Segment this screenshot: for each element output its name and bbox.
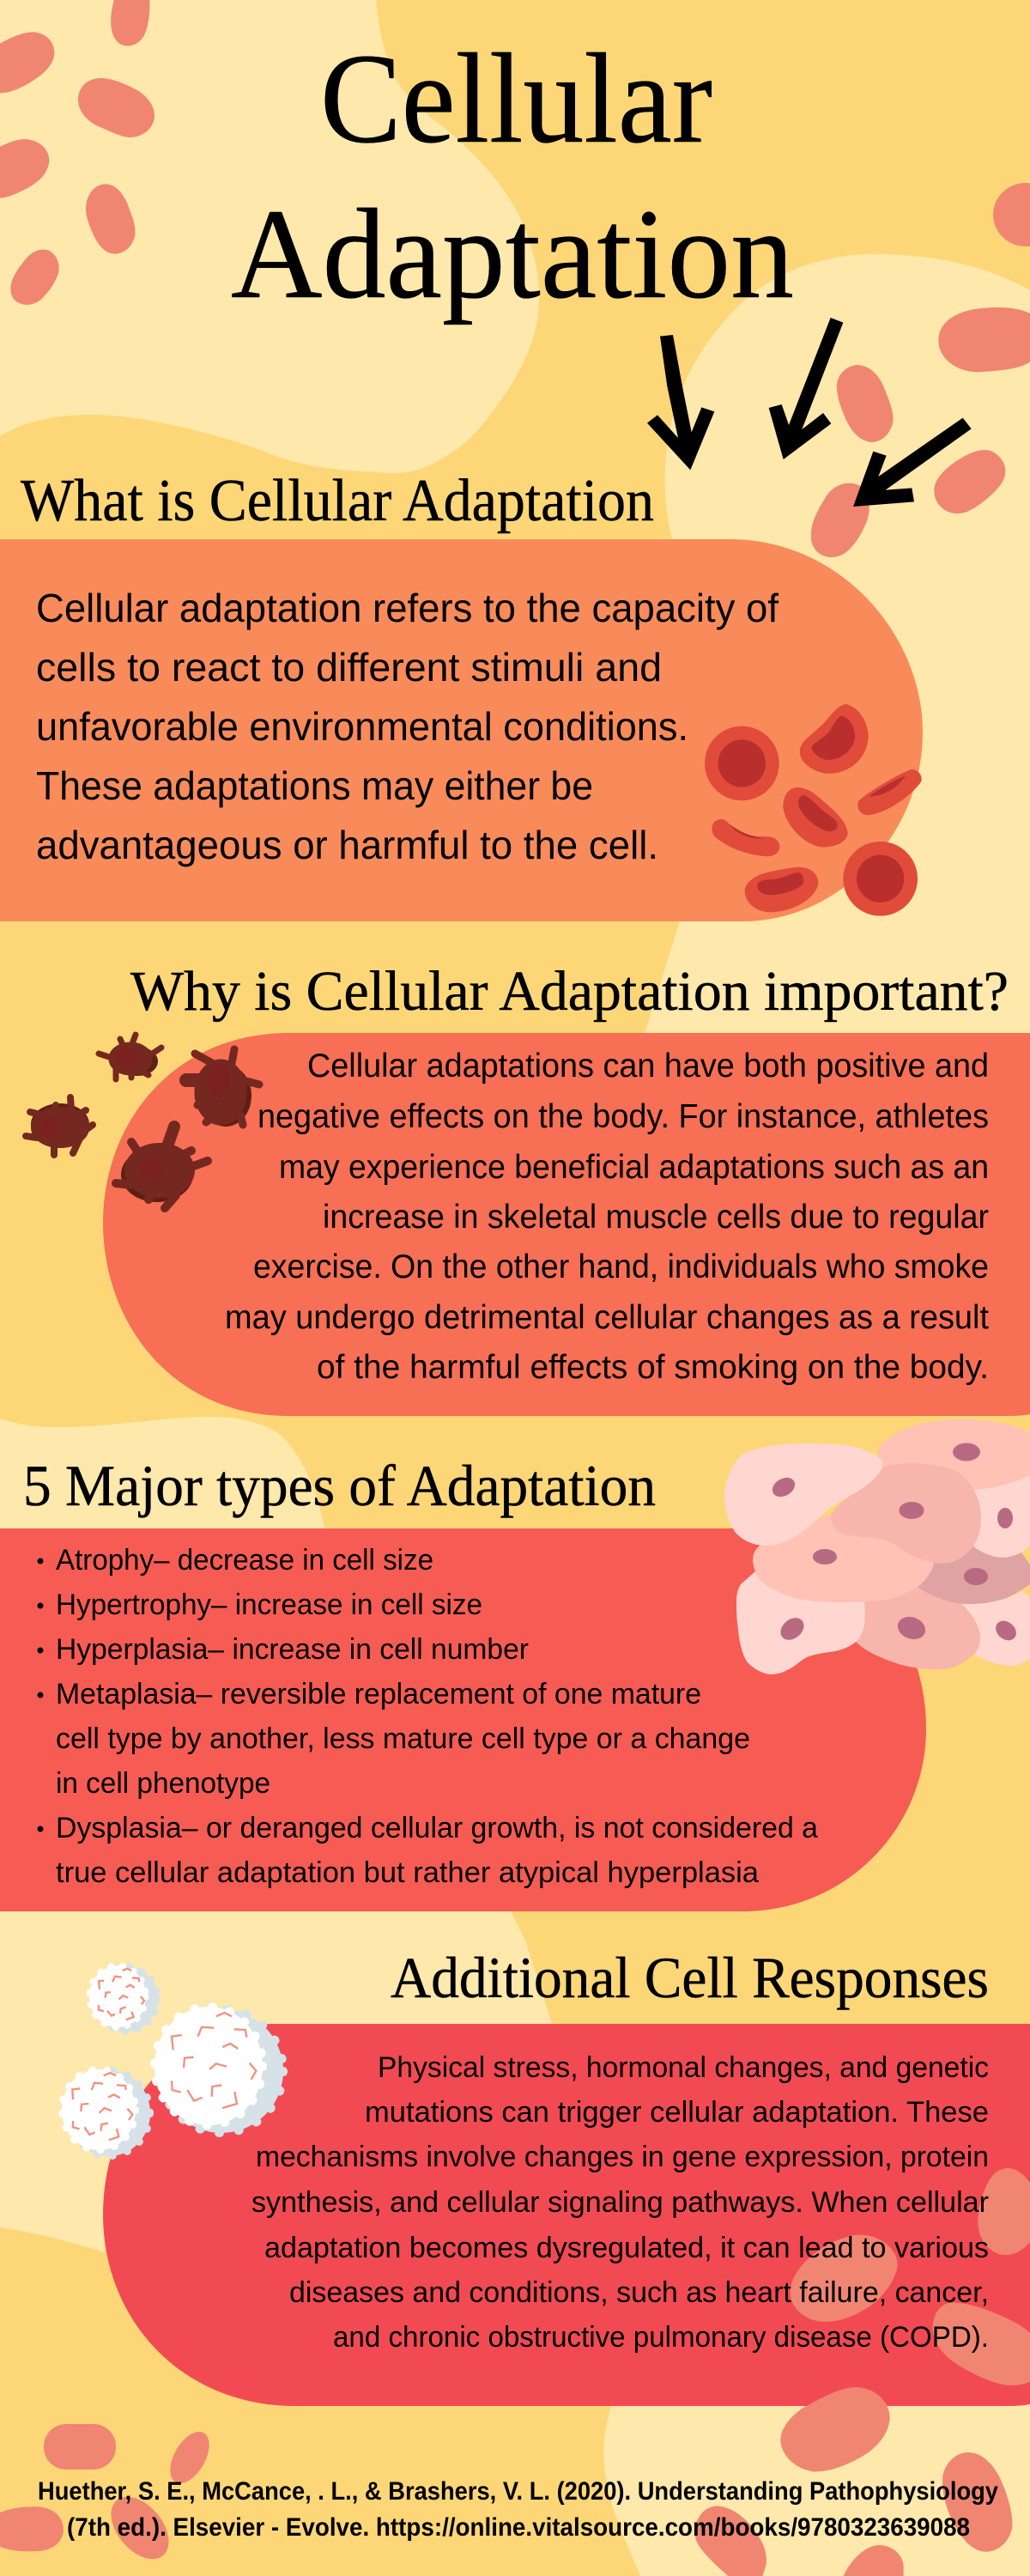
panel body text: cells to react to different stimuli and [36, 645, 662, 690]
text: additional cell responses [251, 2051, 989, 2354]
text: additional cell responses: mechanisms involve changes in gene expression, protein [256, 2141, 989, 2173]
citation [38, 2477, 998, 2542]
panel body text: may experience beneficial adaptations such as an [279, 1149, 989, 1186]
icon: white blood cells [62, 1965, 283, 2156]
bullet list: cell type by another, less mature cell type or a change [56, 1722, 750, 1755]
panel body text: These adaptations may either be [36, 763, 593, 808]
arrows pointing to heading [647, 318, 972, 507]
text: additional cell responses: synthesis, and cellular signaling pathways. When cellular [251, 2186, 989, 2219]
panel body text: Cellular adaptations can have both positive and [307, 1048, 989, 1084]
panel: additional cell responses [103, 2024, 1030, 2406]
panel body text: Cellular adaptation refers to the capacity of [36, 586, 779, 630]
bullet list: Hyperplasia– increase in cell number [56, 1633, 529, 1666]
title: Adaptation [231, 183, 794, 325]
panel body text [36, 586, 779, 867]
panel: 5 major types of adaptation [0, 1528, 926, 1911]
icon: red blood cells [705, 704, 922, 916]
panel: why is cellular adaptation important [103, 1033, 1030, 1416]
bullet list: Metaplasia– reversible replacement of one mature [56, 1678, 701, 1710]
title: Cellular [320, 27, 712, 170]
panel body text [225, 1048, 989, 1386]
decorative cell blobs: upper right [811, 307, 1030, 557]
panel body text: unfavorable environmental conditions. [36, 704, 688, 749]
bullet list [38, 1544, 818, 1889]
bullet list: in cell phenotype [56, 1767, 270, 1800]
text: additional cell responses: and chronic obstructive pulmonary disease (COPD). [333, 2321, 989, 2354]
decorative cell blobs: bottom left [0, 2424, 217, 2570]
panel body text: may undergo detrimental cellular changes as a result [225, 1299, 989, 1336]
heading: what is cellular adaptation: What is Cellular Adaptation [21, 468, 654, 534]
decorative cell blobs: top left [0, 0, 154, 305]
heading: additional cell responses: Additional Cell Responses [391, 1945, 989, 2010]
panel body text: exercise. On the other hand, individuals who smoke [253, 1249, 989, 1285]
icon: dark spiky cells [26, 1035, 259, 1208]
citation: (7th ed.). Elsevier - Evolve. https://online.vitalsource.com/books/9780323639088 [67, 2513, 970, 2542]
title [231, 27, 794, 325]
bullet list: Dysplasia– or deranged cellular growth, is not considered a [56, 1812, 818, 1844]
bullet list: true cellular adaptation but rather atypical hyperplasia [56, 1856, 759, 1889]
heading: 5 major types of adaptation: 5 Major types of Adaptation [23, 1453, 656, 1518]
panel body text: advantageous or harmful to the cell. [36, 823, 658, 867]
decorative cell blob: top right edge [993, 183, 1030, 246]
panel: what is cellular adaptation [0, 539, 923, 921]
heading: why is cellular adaptation important: Why is Cellular Adaptation important? [130, 960, 1009, 1023]
text: additional cell responses: Physical stress, hormonal changes, and genetic [378, 2051, 989, 2084]
decorative cell blobs: bottom right [695, 2168, 1030, 2576]
text: additional cell responses: diseases and conditions, such as heart failure, cancer, [289, 2276, 989, 2309]
text: additional cell responses: adaptation becomes dysregulated, it can lead to various [264, 2232, 989, 2264]
panel body text: increase in skeletal muscle cells due to regular [323, 1199, 989, 1236]
text: additional cell responses: mutations can trigger cellular adaptation. These [365, 2096, 989, 2129]
panel body text: negative effects on the body. For instance, athletes [258, 1098, 989, 1135]
bullet list: Hypertrophy– increase in cell size [56, 1589, 482, 1621]
panel body text: of the harmful effects of smoking on the body. [317, 1349, 989, 1386]
bullet list: Atrophy– decrease in cell size [56, 1544, 433, 1577]
icon: pink tissue cells [724, 1419, 1030, 1674]
